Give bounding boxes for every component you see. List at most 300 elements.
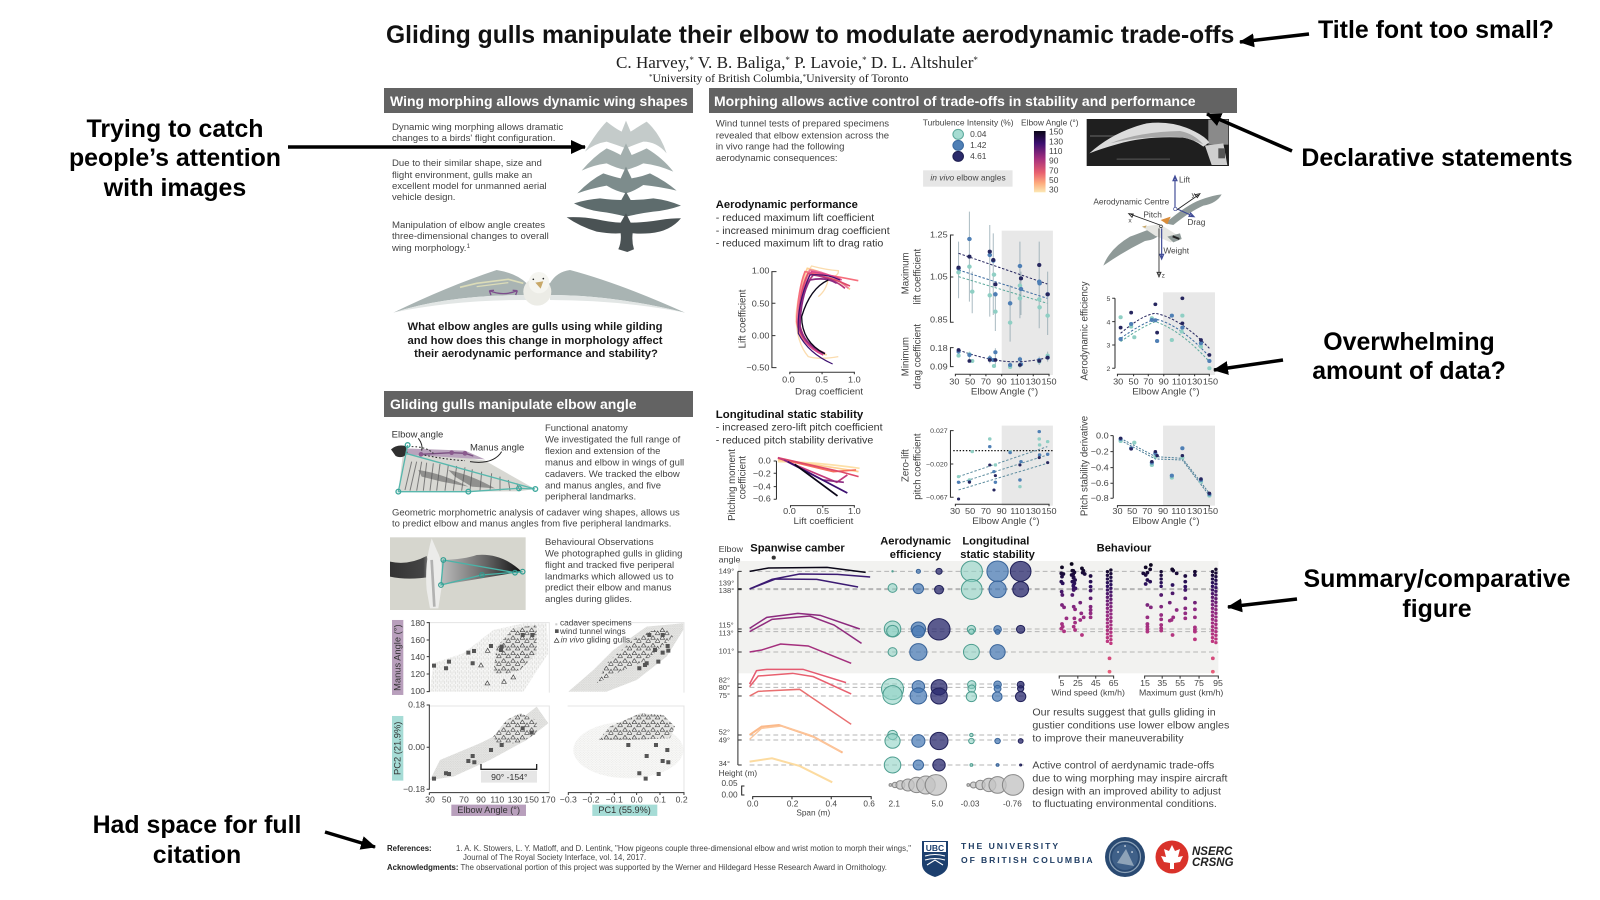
diagram: aerodynamic forces on gull: Lift bbox=[1179, 175, 1191, 185]
image: cadaver wing with landmarks bbox=[391, 430, 538, 494]
chart: longitudinal static stability bubbles bbox=[960, 535, 1036, 809]
chart: maximum lift and minimum drag: Maximum bbox=[901, 252, 912, 294]
annotation: full citation: Had space for full bbox=[93, 811, 301, 839]
legend: elbow angle colour bar bbox=[1021, 119, 1079, 195]
chart: behaviour strip plots: Wind speed (km/h) bbox=[1051, 687, 1125, 697]
chart: pitch stability derivative: −0.4 bbox=[1091, 463, 1109, 472]
chart: aerodynamic efficiency: 150 bbox=[1203, 377, 1218, 386]
legend: turbulence intensity: 1.42 bbox=[970, 141, 987, 150]
chart: maximum lift and minimum drag: 110 bbox=[1010, 377, 1025, 386]
authors: * bbox=[689, 55, 694, 65]
diagram: aerodynamic forces on gull: x bbox=[1128, 218, 1132, 225]
authors: D. L. Altshuler bbox=[867, 53, 974, 72]
legend: elbow angle colour bar: 90 bbox=[1049, 157, 1059, 166]
annotation: full citation bbox=[93, 811, 301, 869]
text block: wing morphing intro: 1 bbox=[466, 243, 470, 250]
chart: zero-lift pitch coefficient bbox=[901, 426, 1057, 527]
logo: NSERC CRSNG: CRSNG bbox=[1192, 857, 1234, 869]
chart: maximum lift and minimum drag: 0.85 bbox=[930, 315, 948, 324]
references and acknowledgments: 1. A. K. Stowers, L. Y. Matloff, and D. Lentink, "How pigeons couple three-dimensional elbow and wrist motion to morph their wings," bbox=[456, 844, 911, 853]
chart: PC2 vs elbow angle: 130 bbox=[508, 795, 522, 805]
heading: elbow angle bbox=[384, 391, 693, 417]
icon: stacked gull silhouettes bbox=[567, 121, 681, 252]
logo: round crest bbox=[1105, 837, 1145, 877]
chart: manus angle vs elbow angle bbox=[392, 618, 684, 696]
axis: elbow angle rows: 149° bbox=[719, 566, 734, 575]
chart: manus angle vs elbow angle: 160 bbox=[411, 635, 425, 645]
references and acknowledgments: Journal of The Royal Society Interface, vol. 14, 2017. bbox=[463, 853, 646, 862]
logo: UBC: UBC bbox=[926, 843, 944, 853]
legend: elbow angle colour bar: 30 bbox=[1049, 186, 1059, 195]
axis: elbow angle rows bbox=[719, 544, 744, 768]
axis: height and span scale: 0.0 bbox=[747, 800, 759, 809]
authors: C. Harvey, bbox=[616, 53, 689, 72]
chart: pitch stability derivative: Pitch stability derivative bbox=[1079, 415, 1090, 516]
text block: wind tunnel intro: Wind tunnel tests of prepared specimens bbox=[716, 119, 889, 129]
chart: pitch stability derivative: 0.0 bbox=[1096, 431, 1109, 440]
heading: wing morphing: Wing morphing allows dynamic wing shapes bbox=[390, 93, 688, 109]
chart: PC2 vs elbow angle: 90° -154° bbox=[491, 772, 527, 782]
text block: functional anatomy: Functional anatomy bbox=[545, 423, 628, 434]
chart: maximum lift and minimum drag: Elbow Angle (°) bbox=[971, 387, 1038, 397]
image: cadaver wing with landmarks: Elbow angle bbox=[392, 430, 443, 441]
axis: height and span scale: 0.00 bbox=[721, 790, 738, 799]
chart: manus angle vs elbow angle: 180 bbox=[411, 618, 425, 628]
axis: elbow angle rows: 34° bbox=[719, 759, 730, 768]
chart: PC2 vs elbow angle: 0.00 bbox=[408, 742, 425, 752]
chart: pitching moment vs lift bbox=[727, 449, 861, 527]
authors bbox=[616, 53, 978, 85]
authors: University of Toronto bbox=[806, 71, 909, 85]
arrow: to references bbox=[325, 832, 375, 847]
axis: height and span scale: 0.05 bbox=[721, 779, 738, 788]
chart: lift vs drag coefficient: Drag coefficient bbox=[795, 387, 863, 397]
chart: pitching moment vs lift: coefficient bbox=[737, 456, 749, 499]
chart: PC2 vs PC1 bbox=[560, 713, 688, 816]
text block: functional anatomy bbox=[545, 423, 684, 503]
chart: spanwise camber: Spanwise camber bbox=[750, 542, 845, 554]
chart: pitch stability derivative: Elbow Angle (°) bbox=[1132, 516, 1199, 527]
chart: maximum lift and minimum drag: 1.05 bbox=[930, 272, 948, 282]
diagram: aerodynamic forces on gull: Pitch bbox=[1143, 210, 1162, 220]
chart: behaviour strip plots: 95 bbox=[1213, 678, 1223, 688]
chart: pitch stability derivative: −0.6 bbox=[1091, 478, 1109, 488]
diagram: aerodynamic forces on gull: Weight bbox=[1163, 246, 1190, 256]
chart: aerodynamic efficiency bubbles bbox=[880, 535, 951, 809]
legend: specimen types: in vivo gliding gulls bbox=[561, 635, 630, 645]
text block: wind tunnel intro: in vivo range had the following bbox=[716, 142, 844, 152]
authors: * bbox=[785, 55, 790, 65]
callout: research question: their aerodynamic performance and stability? bbox=[414, 348, 658, 360]
chart: aerodynamic efficiency: 4 bbox=[1107, 319, 1111, 326]
chart: PC2 vs PC1: −0.2 bbox=[582, 795, 600, 805]
references and acknowledgments: Acknowledgments: The observational portion of this project was supported by the Werner and Hildegard Hesse Research Award in Ornithology. bbox=[387, 863, 887, 872]
text block: wing morphing intro: three-dimensional changes to overall bbox=[392, 231, 549, 242]
chart: maximum lift and minimum drag bbox=[901, 212, 1057, 397]
chart: behaviour strip plots: Behaviour bbox=[1097, 542, 1152, 554]
text block: longitudinal static stability: Longitudinal static stability bbox=[716, 409, 864, 421]
text block: wing morphing intro: flight environment, gulls make an bbox=[392, 170, 532, 181]
chart: pitching moment vs lift: −0.4 bbox=[753, 482, 771, 491]
chart: longitudinal static stability bubbles: static stability bbox=[960, 549, 1036, 561]
chart: PC2 vs elbow angle: PC2 (21.9%) bbox=[393, 722, 403, 775]
legend: elbow angle colour bar: 110 bbox=[1049, 147, 1063, 156]
text block: behavioural observations: predict their elbow and manus bbox=[545, 583, 672, 594]
chart: zero-lift pitch coefficient: pitch coefficient bbox=[912, 433, 923, 500]
chart: behaviour strip plots: 25 bbox=[1073, 678, 1083, 688]
image: cadaver wing with landmarks: Manus angle bbox=[470, 442, 524, 453]
chart: aerodynamic efficiency: 30 bbox=[1113, 377, 1123, 386]
axis: elbow angle rows: 138° bbox=[719, 586, 734, 595]
heading: elbow angle: Gliding gulls manipulate elbow angle bbox=[390, 396, 637, 412]
chart: maximum lift and minimum drag: 0.18 bbox=[930, 343, 948, 353]
chart: pitching moment vs lift: 0.5 bbox=[816, 506, 829, 516]
authors: * bbox=[649, 73, 653, 81]
callout: research question bbox=[407, 321, 663, 360]
chart: zero-lift pitch coefficient: Elbow Angle (°) bbox=[972, 516, 1040, 527]
chart: PC2 vs elbow angle: 110 bbox=[490, 795, 504, 805]
chart: behaviour strip plots: 15 bbox=[1140, 678, 1150, 688]
chart: spanwise camber bbox=[750, 542, 870, 782]
axis: elbow angle rows: 113° bbox=[719, 628, 734, 637]
chart: zero-lift pitch coefficient: 30 bbox=[950, 506, 960, 516]
text block: behavioural observations: flight and tracked five periperal bbox=[545, 560, 674, 571]
text block: wing morphing intro: vehicle design. bbox=[392, 192, 455, 203]
text block: functional anatomy: flexion and extension of the bbox=[545, 446, 660, 457]
chart: lift vs drag coefficient: 0.50 bbox=[752, 299, 770, 308]
chart: manus angle vs elbow angle: Manus Angle (°) bbox=[393, 624, 403, 691]
chart: lift vs drag coefficient: 0.00 bbox=[752, 331, 770, 340]
text block: longitudinal static stability: - increased zero-lift pitch coefficient bbox=[716, 423, 883, 434]
text block: wing morphing intro: Dynamic wing morphing allows dramatic bbox=[392, 122, 563, 133]
chart: manus angle vs PC1 bbox=[568, 623, 683, 692]
authors: * bbox=[803, 73, 807, 81]
callout: research question: and how does this change in morphology affect bbox=[407, 335, 663, 347]
image: gliding gull photograph bbox=[390, 537, 526, 610]
annotation: overwhelming data: amount of data? bbox=[1312, 357, 1506, 385]
chart: lift vs drag coefficient: Lift coefficient bbox=[737, 289, 749, 348]
chart: aerodynamic efficiency: 70 bbox=[1143, 377, 1153, 386]
chart: PC2 vs elbow angle: 90 bbox=[476, 795, 486, 805]
chart: pitch stability derivative bbox=[1079, 415, 1218, 527]
chart: pitching moment vs lift: 1.0 bbox=[848, 506, 861, 516]
chart: longitudinal static stability bubbles: Longitudinal bbox=[962, 535, 1029, 547]
chart: pitch stability derivative: 50 bbox=[1127, 506, 1137, 516]
diagram: aerodynamic forces on gull: Drag bbox=[1187, 217, 1206, 227]
chart: aerodynamic efficiency: 50 bbox=[1129, 377, 1139, 386]
chart: zero-lift pitch coefficient: 0.027 bbox=[930, 428, 948, 435]
diagram: aerodynamic forces on gull bbox=[1093, 175, 1222, 280]
axis: height and span scale bbox=[719, 769, 875, 817]
text block: wing morphing intro: Due to their similar shape, size and bbox=[392, 158, 542, 169]
legend: turbulence intensity: in vivo elbow angles bbox=[930, 174, 1006, 183]
axis: elbow angle rows: angle bbox=[719, 555, 741, 565]
text block: conclusion: due to wing morphing may inspire aircraft bbox=[1032, 773, 1228, 785]
chart: aerodynamic efficiency: 90 bbox=[1159, 377, 1169, 386]
axis: elbow angle rows: 49° bbox=[719, 735, 730, 744]
chart: aerodynamic efficiency bbox=[1079, 281, 1218, 397]
chart: pitch stability derivative: 90 bbox=[1158, 506, 1168, 516]
chart: lift vs drag coefficient: −0.50 bbox=[746, 363, 770, 372]
chart: aerodynamic efficiency bubbles: 5.0 bbox=[932, 800, 944, 809]
legend: elbow angle colour bar: 70 bbox=[1049, 167, 1059, 175]
chart: maximum lift and minimum drag: 150 bbox=[1041, 377, 1057, 386]
chart: behaviour strip plots: 45 bbox=[1091, 678, 1101, 688]
chart: PC2 vs elbow angle: 50 bbox=[442, 795, 452, 805]
text block: aerodynamic performance: - reduced maximum lift coefficient bbox=[716, 213, 874, 224]
text block: behavioural observations: We photographed gulls in gliding bbox=[545, 549, 682, 560]
chart: maximum lift and minimum drag: 0.09 bbox=[930, 362, 948, 372]
references and acknowledgments: References: bbox=[387, 844, 432, 853]
annotation: summary figure: Summary/comparative bbox=[1303, 565, 1571, 593]
text block: wind tunnel intro bbox=[716, 119, 889, 163]
logo: UBC bbox=[922, 841, 1094, 877]
heading: wing morphing bbox=[384, 88, 693, 113]
text block: longitudinal static stability bbox=[716, 409, 883, 447]
chart: manus angle vs elbow angle: 140 bbox=[411, 652, 425, 662]
chart: PC2 vs elbow angle: 0.18 bbox=[408, 700, 425, 710]
chart: pitch stability derivative: −0.8 bbox=[1091, 493, 1109, 503]
arrow: to heading bbox=[1207, 114, 1292, 151]
annotation: catch attention: Trying to catch bbox=[86, 115, 264, 143]
authors: P. Lavoie, bbox=[790, 53, 862, 72]
arrow: to summary figure bbox=[1228, 599, 1297, 607]
chart: lift vs drag coefficient: 0.5 bbox=[815, 375, 828, 385]
chart: pitching moment vs lift: 0.0 bbox=[783, 506, 796, 516]
text block: aerodynamic performance bbox=[716, 199, 890, 250]
legend: specimen types bbox=[554, 617, 632, 645]
chart: lift vs drag coefficient: 1.00 bbox=[752, 266, 770, 276]
authors: University of British Columbia, bbox=[652, 71, 803, 85]
chart: summary comparative figure bbox=[719, 535, 1223, 817]
chart: PC2 vs PC1: −0.3 bbox=[560, 795, 577, 805]
chart: pitch stability derivative: −0.2 bbox=[1091, 447, 1109, 456]
text block: conclusion bbox=[1032, 760, 1228, 810]
text block: behavioural observations: landmarks which allowed us to bbox=[545, 571, 674, 582]
annotation: summary figure bbox=[1303, 565, 1571, 623]
chart: manus angle vs elbow angle: 120 bbox=[411, 669, 425, 679]
axis: elbow angle rows: Elbow bbox=[719, 544, 744, 554]
text block: results bbox=[1032, 707, 1229, 744]
legend: elbow angle colour bar: 50 bbox=[1049, 176, 1059, 185]
panel: wing morphing bbox=[384, 88, 693, 360]
annotation: summary figure: figure bbox=[1402, 595, 1472, 623]
authors: * bbox=[862, 55, 867, 65]
legend: specimen types: cadaver specimens bbox=[560, 617, 632, 627]
chart: PC2 vs elbow angle: Elbow Angle (°) bbox=[457, 805, 520, 815]
chart: behaviour strip plots: 35 bbox=[1157, 678, 1167, 688]
text block: geometric morphometrics: Geometric morphometric analysis of cadaver wing shapes, allows us bbox=[392, 507, 680, 518]
chart: aerodynamic efficiency: 110 bbox=[1172, 377, 1187, 386]
logo: UBC: THE UNIVERSITY bbox=[961, 841, 1060, 851]
text block: functional anatomy: and manus angles, and five bbox=[545, 480, 661, 491]
legend: turbulence intensity bbox=[923, 119, 1014, 187]
annotation: declarative statements: Declarative statements bbox=[1301, 144, 1573, 172]
chart: maximum lift and minimum drag: 30 bbox=[949, 377, 959, 386]
chart: zero-lift pitch coefficient: 50 bbox=[965, 506, 975, 516]
text block: functional anatomy: peripheral landmarks. bbox=[545, 492, 636, 503]
chart: PC2 vs elbow angle bbox=[392, 700, 684, 816]
chart: aerodynamic efficiency: 3 bbox=[1107, 343, 1111, 350]
chart: pitching moment vs lift: Pitching moment bbox=[727, 449, 738, 521]
chart: pitching moment vs lift: 0.0 bbox=[758, 456, 771, 466]
annotation: overwhelming data: Overwhelming bbox=[1323, 328, 1495, 356]
diagram: aerodynamic forces on gull: y bbox=[1192, 192, 1196, 199]
heading: trade-offs bbox=[709, 88, 1237, 113]
title: Gliding gulls manipulate their elbow to modulate aerodynamic trade-offs bbox=[386, 22, 1234, 49]
chart: lift vs drag coefficient: 0.0 bbox=[782, 375, 795, 385]
legend: elbow angle colour bar: 150 bbox=[1049, 128, 1064, 137]
chart: PC2 vs elbow angle: 30 bbox=[425, 795, 435, 805]
chart: maximum lift and minimum drag: 70 bbox=[981, 377, 991, 386]
chart: PC2 vs elbow angle: 150 bbox=[524, 795, 539, 805]
text block: conclusion: to fluctuating environmental conditions. bbox=[1032, 798, 1217, 810]
chart: behaviour strip plots: 5 bbox=[1060, 678, 1065, 688]
chart: PC2 vs elbow angle: 170 bbox=[541, 795, 556, 805]
references and acknowledgments bbox=[387, 844, 911, 872]
text block: conclusion: Active control of aerdynamic trade-offs bbox=[1032, 760, 1214, 772]
text block: results: Our results suggest that gulls gliding in bbox=[1032, 707, 1216, 719]
chart: zero-lift pitch coefficient: 90 bbox=[997, 506, 1007, 516]
chart: pitch stability derivative: 130 bbox=[1187, 506, 1202, 516]
chart: PC2 vs PC1: 0.2 bbox=[676, 795, 688, 805]
chart: PC2 vs PC1: 0.1 bbox=[654, 795, 666, 805]
arrow: to title bbox=[1240, 34, 1309, 42]
chart: pitching moment vs lift: −0.2 bbox=[753, 469, 771, 478]
text block: geometric morphometrics: to predict elbow and manus angles from five peripheral landmarks. bbox=[392, 519, 671, 530]
text block: aerodynamic performance: Aerodynamic performance bbox=[716, 199, 858, 211]
chart: manus angle vs elbow angle: 100 bbox=[411, 686, 425, 696]
text block: functional anatomy: We investigated the full range of bbox=[545, 435, 681, 446]
arrow: to gull images bbox=[288, 145, 585, 149]
logo: UBC: OF BRITISH COLUMBIA bbox=[961, 855, 1094, 865]
chart: pitch stability derivative: 70 bbox=[1142, 506, 1152, 516]
chart: zero-lift pitch coefficient: −0.067 bbox=[926, 495, 948, 502]
arrow: to efficiency chart bbox=[1214, 360, 1283, 370]
logo: NSERC CRSNG: NSERC bbox=[1192, 846, 1233, 858]
annotation: catch attention bbox=[69, 115, 281, 202]
image: gull in wind tunnel bbox=[1087, 119, 1229, 166]
text block: wind tunnel intro: aerodynamic consequences: bbox=[716, 153, 838, 163]
text block: longitudinal static stability: - reduced pitch stability derivative bbox=[716, 436, 874, 447]
chart: maximum lift and minimum drag: drag coefficient bbox=[912, 324, 923, 389]
axis: elbow angle rows: 75° bbox=[719, 691, 730, 700]
legend: specimen types: wind tunnel wings bbox=[559, 626, 626, 636]
diagram: aerodynamic forces on gull: Aerodynamic Centre bbox=[1093, 196, 1170, 206]
chart: pitching moment vs lift: Lift coefficient bbox=[794, 516, 854, 527]
chart: aerodynamic efficiency: 2 bbox=[1107, 366, 1111, 373]
axis: elbow angle rows: 52° bbox=[719, 727, 730, 736]
chart: pitch stability derivative: 150 bbox=[1203, 506, 1218, 516]
chart: maximum lift and minimum drag: Minimum bbox=[901, 337, 912, 376]
annotation: overwhelming data bbox=[1312, 328, 1506, 385]
annotation: title font too small: Title font too small? bbox=[1318, 16, 1554, 44]
axis: elbow angle rows: 115° bbox=[719, 620, 734, 629]
text block: wing morphing intro: excellent model for unmanned aerial bbox=[392, 181, 547, 192]
chart: PC2 vs PC1: PC1 (55.9%) bbox=[598, 805, 651, 815]
chart: aerodynamic efficiency: Aerodynamic efficiency bbox=[1079, 281, 1090, 381]
axis: elbow angle rows: 139° bbox=[719, 579, 734, 588]
chart: behaviour strip plots: Maximum gust (km/h) bbox=[1139, 687, 1223, 697]
chart: zero-lift pitch coefficient: 130 bbox=[1026, 506, 1041, 516]
chart: aerodynamic efficiency: Elbow Angle (°) bbox=[1132, 387, 1199, 397]
chart: longitudinal static stability bubbles: -0.76 bbox=[1003, 800, 1022, 809]
axis: height and span scale: Span (m) bbox=[796, 808, 831, 817]
text block: wind tunnel intro: revealed that elbow extension across the bbox=[716, 131, 889, 140]
chart: zero-lift pitch coefficient: Zero-lift bbox=[901, 449, 912, 482]
callout: research question: What elbow angles are gulls using while gilding bbox=[407, 321, 663, 333]
chart: maximum lift and minimum drag: 1.25 bbox=[930, 230, 948, 240]
authors: V. B. Baliga, bbox=[694, 53, 785, 72]
chart: maximum lift and minimum drag: 130 bbox=[1026, 377, 1041, 386]
chart: maximum lift and minimum drag: lift coefficient bbox=[912, 249, 923, 304]
chart: pitch stability derivative: 30 bbox=[1112, 506, 1123, 516]
text block: aerodynamic performance: - reduced maximum lift to drag ratio bbox=[716, 239, 884, 250]
legend: turbulence intensity: 4.61 bbox=[970, 152, 987, 161]
legend: turbulence intensity: 0.04 bbox=[970, 130, 987, 139]
chart: pitch stability derivative: 110 bbox=[1171, 506, 1186, 516]
text block: functional anatomy: manus and elbow in wings of gull bbox=[545, 457, 684, 468]
chart: PC2 vs PC1: −0.1 bbox=[606, 795, 623, 805]
text block: conclusion: design with an improved ability to adjust bbox=[1032, 785, 1221, 797]
chart: maximum lift and minimum drag: 50 bbox=[965, 377, 975, 386]
text block: behavioural observations: angles during glides. bbox=[545, 594, 632, 605]
chart: aerodynamic efficiency: 5 bbox=[1107, 296, 1111, 303]
annotation: catch attention: people’s attention bbox=[69, 144, 281, 172]
chart: behaviour strip plots: 75 bbox=[1194, 678, 1204, 688]
chart: aerodynamic efficiency bubbles: 2.1 bbox=[889, 800, 900, 809]
legend: elbow angle colour bar: Elbow Angle (°) bbox=[1021, 119, 1079, 128]
chart: aerodynamic efficiency: 130 bbox=[1187, 377, 1202, 386]
text block: aerodynamic performance: - increased minimum drag coefficient bbox=[716, 226, 890, 237]
panel: elbow angle bbox=[384, 391, 693, 816]
chart: lift vs drag coefficient bbox=[737, 266, 863, 397]
text block: wing morphing intro: wing morphology. bbox=[392, 243, 466, 254]
chart: PC2 vs elbow angle: −0.18 bbox=[403, 784, 425, 794]
axis: elbow angle rows: 82° bbox=[719, 676, 730, 685]
text block: behavioural observations: Behavioural Observations bbox=[545, 537, 654, 548]
text block: results: to improve their maneuverability bbox=[1032, 732, 1184, 744]
annotation: catch attention: with images bbox=[103, 174, 246, 202]
chart: aerodynamic efficiency bubbles: efficiency bbox=[890, 549, 942, 561]
chart: PC2 vs elbow angle: 70 bbox=[459, 795, 469, 805]
axis: height and span scale: 0.2 bbox=[787, 800, 799, 809]
chart: maximum lift and minimum drag: 90 bbox=[997, 377, 1007, 386]
text block: behavioural observations bbox=[545, 537, 682, 605]
chart: zero-lift pitch coefficient: −0.020 bbox=[926, 461, 948, 468]
axis: height and span scale: 0.6 bbox=[863, 800, 875, 809]
chart: pitching moment vs lift: −0.6 bbox=[753, 494, 771, 504]
diagram: aerodynamic forces on gull: z bbox=[1162, 273, 1165, 280]
text block: wing morphing intro: Manipulation of elbow angle creates bbox=[392, 220, 545, 231]
heading: trade-offs: Morphing allows active control of trade-offs in stability and performance bbox=[714, 93, 1196, 109]
axis: elbow angle rows: 80° bbox=[719, 683, 730, 692]
legend: turbulence intensity: Turbulence Intensity (%) bbox=[923, 119, 1014, 128]
chart: zero-lift pitch coefficient: 70 bbox=[981, 506, 991, 516]
authors: * bbox=[973, 55, 978, 65]
text block: results: gustier conditions use lower elbow angles bbox=[1032, 720, 1229, 732]
axis: height and span scale: Height (m) bbox=[719, 769, 757, 778]
text block: wing morphing intro bbox=[391, 122, 563, 254]
chart: behaviour strip plots: 65 bbox=[1109, 678, 1119, 688]
annotation: full citation: citation bbox=[153, 841, 241, 869]
chart: behaviour strip plots bbox=[1051, 542, 1223, 697]
text block: wing morphing intro: changes to a birds' flight configuration. bbox=[392, 133, 555, 144]
text block: geometric morphometrics bbox=[392, 507, 680, 530]
chart: aerodynamic efficiency bubbles: Aerodynamic bbox=[880, 535, 951, 547]
axis: height and span scale: 0.4 bbox=[825, 800, 837, 809]
text block: functional anatomy: cadavers. We tracked the elbow bbox=[545, 469, 680, 480]
